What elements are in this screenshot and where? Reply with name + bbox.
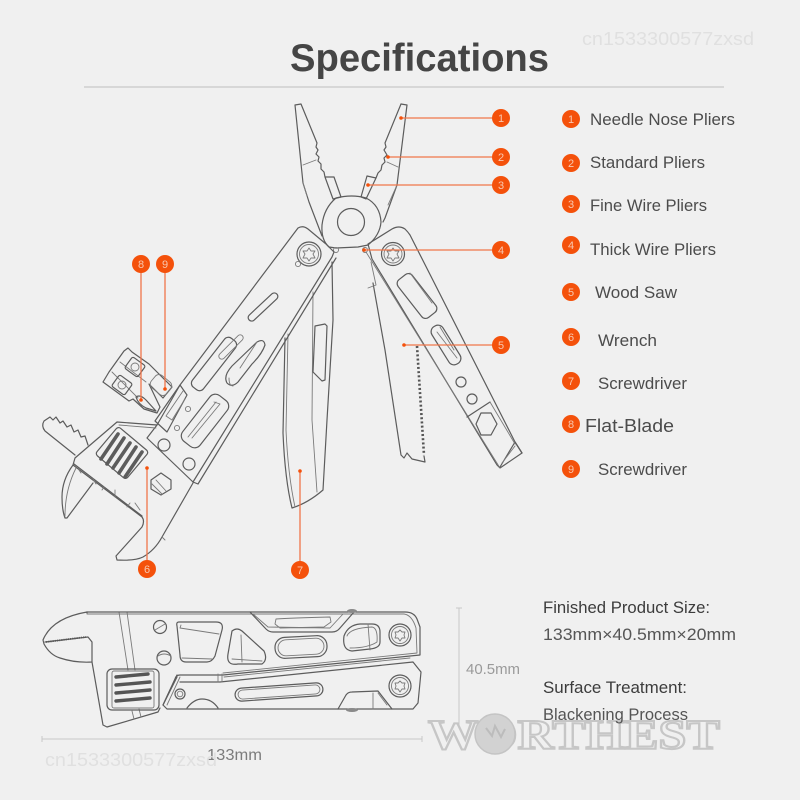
- leader 6: 6: [144, 564, 150, 576]
- tool: knife blade: [283, 262, 333, 508]
- watermark: WORTHEST logo: WORTHEST: [428, 713, 720, 759]
- folded: lower handle: [163, 658, 421, 712]
- legend item 7: [562, 372, 687, 393]
- leader 5: [402, 336, 510, 354]
- legend item 8: [562, 415, 674, 436]
- legend item 9: Screwdriver: [598, 460, 687, 479]
- leader 4: 4: [498, 245, 504, 257]
- dimension: width 133mm: 133mm: [207, 747, 262, 764]
- leader 7: 7: [297, 565, 303, 577]
- legend item 3: 3: [568, 199, 574, 211]
- leader 9: [156, 255, 174, 391]
- leader 3: [366, 176, 510, 194]
- leader 7: [291, 469, 309, 579]
- leader 5: 5: [498, 340, 504, 352]
- legend item 2: Standard Pliers: [590, 153, 705, 172]
- product size text: 133mm×40.5mm×20mm: [543, 626, 736, 644]
- leader 9: 9: [162, 259, 168, 271]
- legend item 7: 7: [568, 376, 574, 388]
- folded: wrench jaw and neck: [43, 612, 160, 727]
- legend item 6: [562, 328, 657, 350]
- leader lines: [132, 109, 510, 579]
- legend item 4: [562, 236, 716, 259]
- tool: pliers head: [295, 104, 407, 252]
- leader 8: 8: [138, 259, 144, 271]
- illustration: folded multitool: [43, 609, 421, 727]
- tool: bits pack: [103, 348, 174, 413]
- leader 3: 3: [498, 180, 504, 192]
- watermark: bottom account id: cn1533300577zxsd: [45, 750, 217, 770]
- legend item 8: Flat-Blade: [585, 416, 674, 436]
- legend item 1: 1: [568, 114, 574, 126]
- leader 1: [399, 109, 510, 127]
- tool: adjustable wrench: [43, 417, 193, 560]
- leader 2: 2: [498, 152, 504, 164]
- illustration: unfolded multitool: [43, 104, 522, 560]
- dimension: height 40.5mm: 40.5mm: [466, 661, 520, 678]
- leader 6: [138, 466, 156, 578]
- tool: left handle: [147, 227, 336, 484]
- legend item 9: 9: [568, 464, 574, 476]
- legend item 1: Needle Nose Pliers: [590, 110, 735, 129]
- legend item 3: Fine Wire Pliers: [590, 196, 707, 215]
- surface treatment text: [543, 679, 688, 724]
- surface treatment text: Blackening Process: [543, 706, 688, 724]
- folded: knurled wheel: [107, 669, 159, 710]
- legend item 5: 5: [568, 287, 574, 299]
- watermark: top account id: cn1533300577zxsd: [582, 29, 754, 49]
- leader 1: 1: [498, 113, 504, 125]
- legend item 6: Wrench: [598, 331, 657, 350]
- title: Specifications: [290, 37, 549, 80]
- tool: wood saw: [368, 262, 425, 462]
- legend: parts list: [562, 110, 735, 479]
- legend item 6: 6: [568, 332, 574, 344]
- surface treatment text: Surface Treatment:: [543, 679, 687, 697]
- legend item 4: Thick Wire Pliers: [590, 240, 716, 259]
- leader 8: [132, 255, 150, 402]
- legend item 7: Screwdriver: [598, 374, 687, 393]
- dimension: height 40.5mm: [456, 608, 520, 728]
- legend item 2: 2: [568, 158, 574, 170]
- legend item 5: Wood Saw: [595, 283, 678, 302]
- folded: upper handle: [87, 609, 420, 705]
- leader 2: [386, 148, 510, 166]
- tool: right handle: [366, 227, 522, 468]
- product size text: [543, 599, 736, 644]
- leader 4: [362, 241, 510, 259]
- legend item 8: 8: [568, 419, 574, 431]
- product size text: Finished Product Size:: [543, 599, 710, 617]
- legend item 4: 4: [568, 240, 574, 252]
